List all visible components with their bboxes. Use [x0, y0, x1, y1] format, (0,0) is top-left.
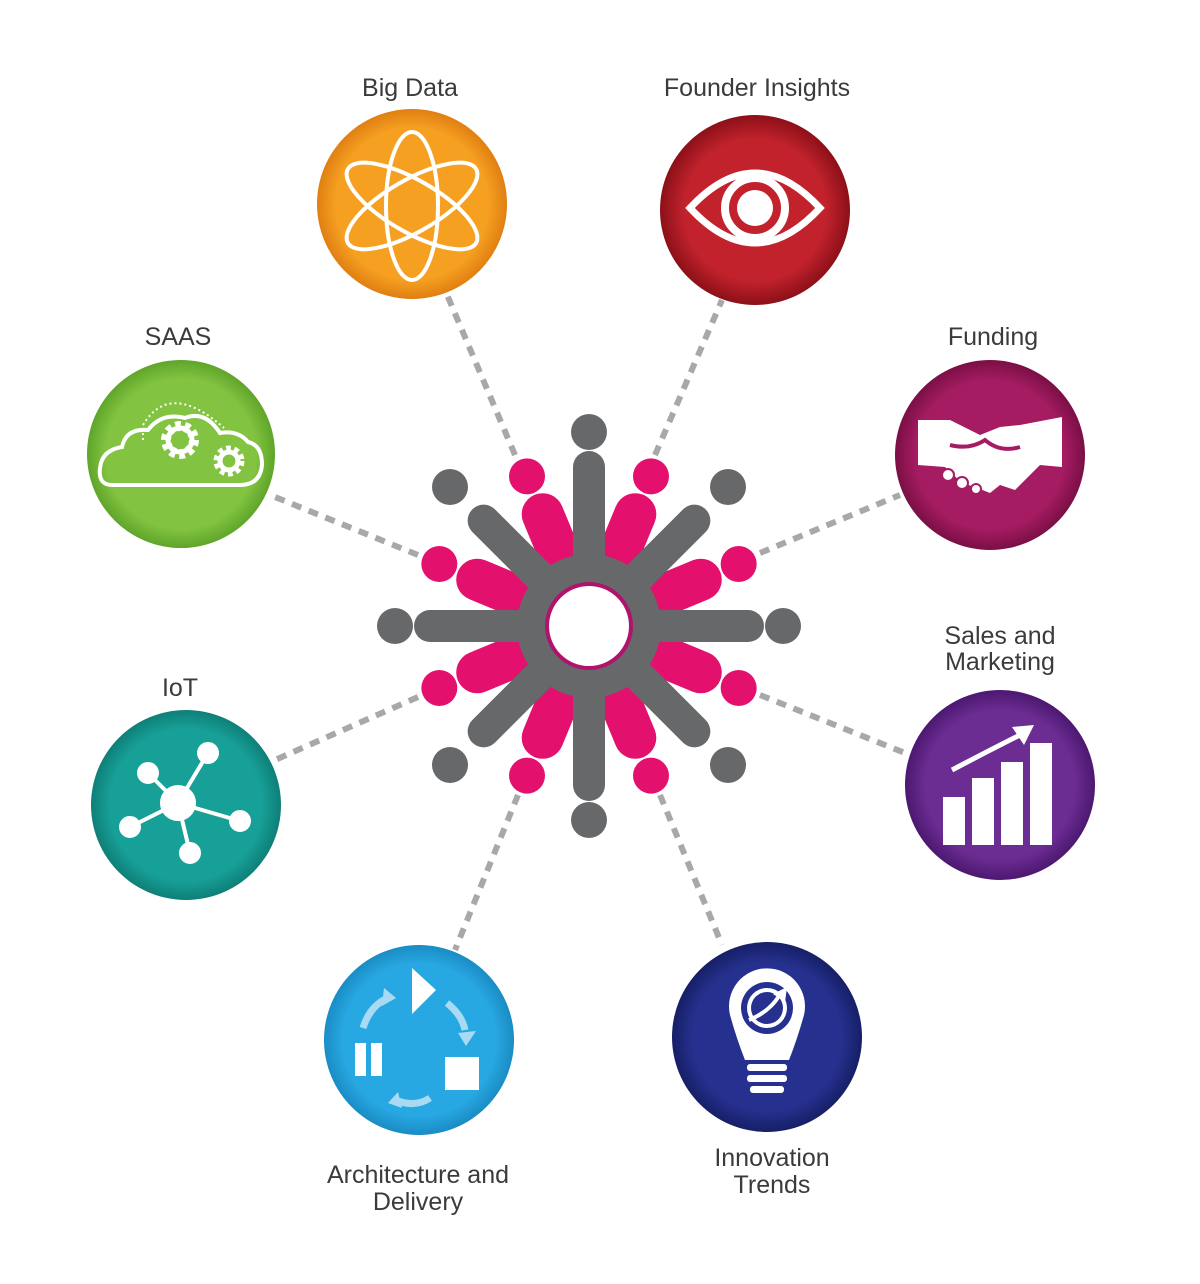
node: Architecture and Delivery	[324, 945, 514, 1216]
node: Funding: Funding	[948, 323, 1038, 351]
icon: atom	[335, 132, 489, 280]
node: Architecture and Delivery: Architecture and	[327, 1161, 509, 1189]
icon: eye	[690, 173, 820, 243]
node: Innovation Trends: Trends	[734, 1171, 810, 1199]
node: Innovation Trends: Innovation	[714, 1144, 830, 1172]
node: Sales and Marketing: Marketing	[945, 648, 1055, 676]
icon: handshake	[918, 417, 1062, 495]
icon: lightbulb	[729, 968, 805, 1093]
node: Innovation Trends	[672, 942, 862, 1199]
node: Big Data	[317, 74, 507, 299]
node: Founder Insights: Founder Insights	[664, 74, 850, 102]
node: Sales and Marketing	[905, 622, 1095, 880]
node: Funding	[895, 323, 1085, 550]
pink figures	[415, 452, 763, 800]
node: SAAS	[87, 323, 275, 548]
gray figures	[377, 414, 801, 838]
icon: cloud gears	[100, 403, 262, 485]
icon: network	[121, 744, 249, 862]
node: SAAS: SAAS	[145, 323, 211, 351]
node: Founder Insights	[660, 74, 850, 305]
node: Architecture and Delivery: Delivery	[373, 1188, 464, 1216]
node: Big Data: Big Data	[362, 74, 458, 102]
icon: bar chart	[943, 725, 1052, 845]
node: IoT: IoT	[162, 674, 198, 702]
node: IoT	[91, 674, 281, 900]
connector lines	[270, 290, 910, 950]
node: Sales and Marketing: Sales and	[944, 622, 1056, 650]
icon: cycle	[355, 968, 479, 1108]
hub	[377, 414, 801, 838]
